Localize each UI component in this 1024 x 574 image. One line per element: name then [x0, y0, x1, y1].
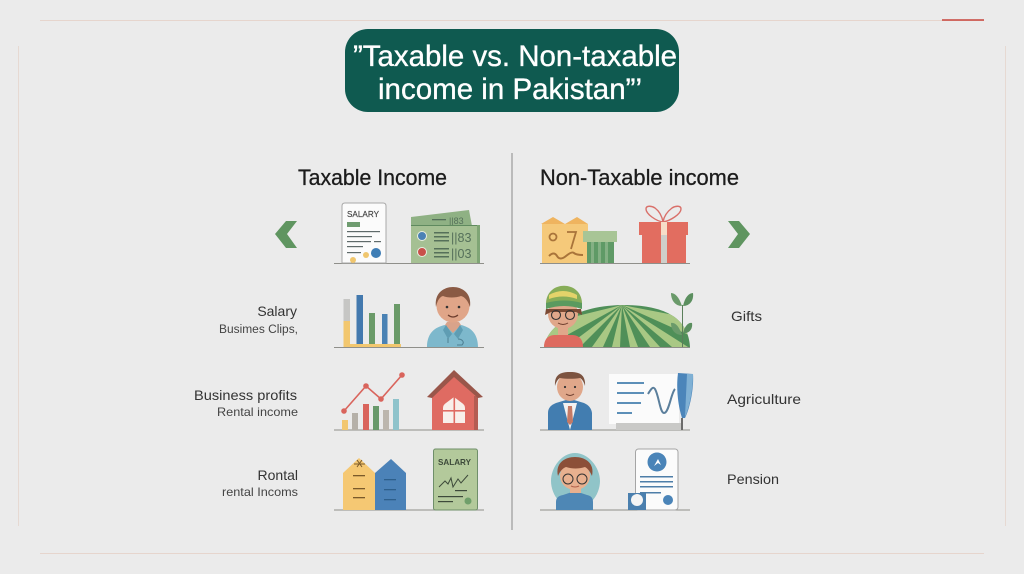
heading: Non-Taxable income: Non-Taxable income [540, 165, 739, 190]
icon: woman portrait [551, 453, 600, 510]
arrow: right chevron [728, 221, 750, 248]
title: ”Taxable vs. Non-taxable [353, 40, 677, 73]
label: Pension: Pension [727, 471, 779, 487]
label: Salary [219, 303, 298, 336]
label: Agriculture: Agriculture [727, 391, 801, 407]
arrow: left chevron [275, 221, 297, 248]
label: Business profits: Business profits [194, 387, 297, 403]
icon: salary certificate [434, 449, 478, 510]
icon: line and bar chart [341, 372, 405, 430]
icon: banknotes: ||83 [451, 231, 471, 245]
icon: farmer with field [544, 286, 694, 347]
icon: salary certificate: SALARY [438, 457, 471, 467]
icon: price tags [343, 458, 406, 510]
label: Rontal: rental Incoms [222, 485, 298, 499]
icon: banknotes [411, 210, 480, 263]
icon: salary document: SALARY [347, 209, 379, 219]
panel: non-taxable income [520, 206, 801, 510]
label: Business profits: Rental income [217, 405, 298, 419]
icon: bar chart [344, 295, 401, 347]
icon: banknotes: ||83 [449, 216, 464, 226]
label: Business profits [194, 387, 298, 419]
label: Rontal [222, 467, 298, 499]
panel: taxable income [194, 203, 484, 510]
icon: pension certificate [628, 449, 678, 510]
title: income in Pakistan”’ [378, 73, 642, 106]
title [345, 29, 679, 112]
icon: gift box [639, 206, 688, 263]
label: Salary: Salary [257, 303, 297, 319]
label: Gifts: Gifts [731, 308, 762, 324]
label: Rontal: Rontal [258, 467, 298, 483]
heading: Taxable Income: Taxable Income [298, 165, 447, 190]
icon: house [427, 370, 483, 430]
icon: cardboard boxes [541, 217, 617, 263]
icon: banknotes: ||03 [451, 247, 471, 261]
icon: businessman [548, 372, 592, 430]
icon: man with stethoscope [427, 287, 478, 347]
label: Salary: Busimes Clips, [219, 324, 298, 336]
icon: salary document [342, 203, 386, 263]
icon: report and pen [609, 373, 693, 430]
